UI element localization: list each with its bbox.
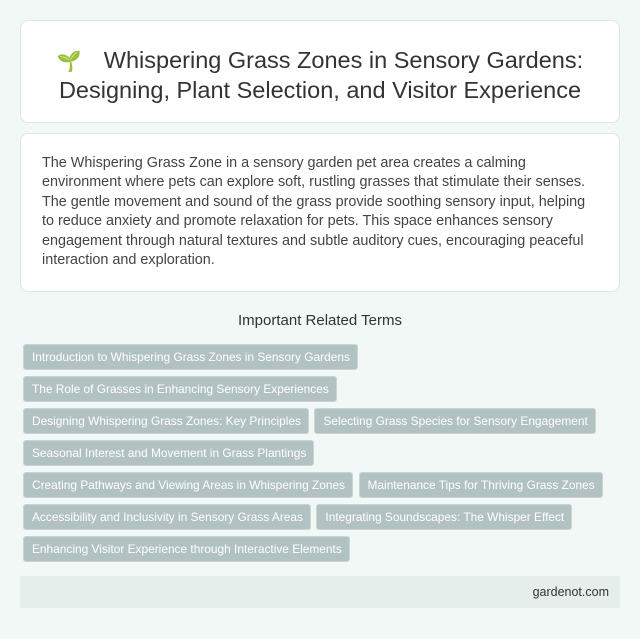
footer [20, 576, 620, 608]
description card: The Whispering Grass Zone in a sensory garden pet area creates a calming [42, 155, 526, 171]
tags list: Accessibility and Inclusivity in Sensory Grass Areas [32, 510, 303, 524]
description card [20, 133, 620, 292]
description card: environment where pets can explore soft, rustling grasses that stimulate their senses. [42, 174, 585, 190]
tags list: Selecting Grass Species for Sensory Engagement [323, 414, 588, 428]
footer: gardenot.com [533, 585, 609, 599]
tags list: Seasonal Interest and Movement in Grass Plantings [32, 446, 306, 460]
tags list: Maintenance Tips for Thriving Grass Zones [368, 478, 595, 492]
description card: engagement through natural textures and subtle auditory cues, encouraging peaceful [42, 233, 584, 249]
tags list [23, 344, 603, 562]
tags list: Introduction to Whispering Grass Zones in Sensory Gardens [32, 350, 350, 364]
tags list: The Role of Grasses in Enhancing Sensory Experiences [32, 382, 329, 396]
description card: to reduce anxiety and promote relaxation for pets. This space enhances sensory [42, 213, 553, 229]
description card: interaction and exploration. [42, 252, 215, 268]
tags list: Designing Whispering Grass Zones: Key Principles [32, 414, 301, 428]
description card: The gentle movement and sound of the grass provide soothing sensory input, helping [42, 194, 585, 210]
title card: 🌱 Whispering Grass Zones in Sensory Gardens: [57, 47, 583, 73]
tags list: Enhancing Visitor Experience through Interactive Elements [32, 542, 342, 556]
title card: Designing, Plant Selection, and Visitor Experience [59, 77, 581, 103]
tags list: Integrating Soundscapes: The Whisper Effect [325, 510, 564, 524]
title card [20, 20, 620, 123]
heading: related terms: Important Related Terms [238, 312, 402, 329]
tags list: Creating Pathways and Viewing Areas in Whispering Zones [32, 478, 345, 492]
